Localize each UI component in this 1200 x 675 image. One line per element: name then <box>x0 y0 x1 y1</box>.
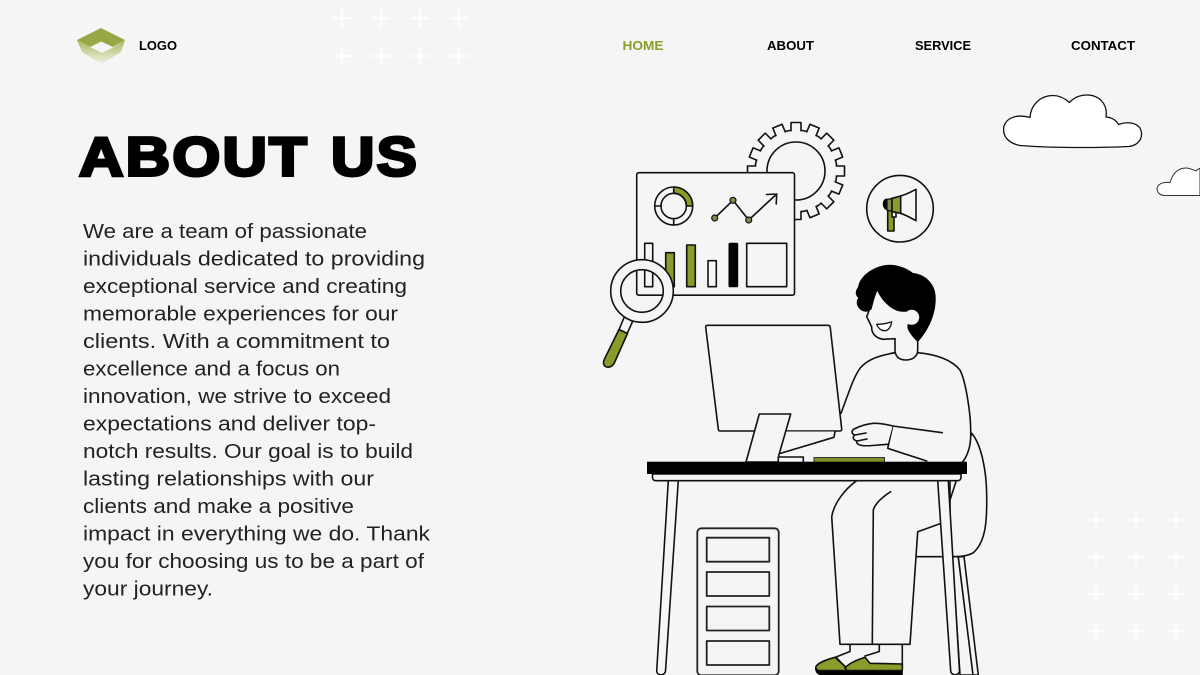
illustration: monitor <box>706 325 842 462</box>
body text block: notch results. Our goal is to build <box>83 440 413 463</box>
body text block: We are a team of passionate <box>83 220 367 243</box>
icon: magnifying glass <box>603 260 673 367</box>
drawer cabinet <box>697 528 779 675</box>
shoes <box>816 657 902 674</box>
monitor screen <box>706 325 842 431</box>
body text block: innovation, we strive to exceed <box>83 385 391 408</box>
illustration: dashboard panel <box>637 173 794 295</box>
monitor stand <box>746 414 791 462</box>
title: ABOUT <box>79 126 309 188</box>
line chart with arrow <box>712 194 777 223</box>
monitor base <box>778 432 835 454</box>
nav item: service: SERVICE <box>915 38 971 53</box>
illustration: gear <box>748 122 844 220</box>
ear <box>904 310 919 325</box>
icon: megaphone <box>867 175 933 242</box>
cloud: small <box>1157 168 1200 196</box>
title <box>79 126 419 188</box>
title: US <box>331 126 419 188</box>
nav item: home: HOME <box>622 38 664 53</box>
sleeve <box>888 426 942 461</box>
body text block: clients. With a commitment to <box>83 330 390 353</box>
keyboard <box>814 458 884 462</box>
neck <box>895 322 918 360</box>
donut chart <box>655 187 693 225</box>
body text block: impact in everything we do. Thank <box>83 522 431 546</box>
body text block: lasting relationships with our <box>83 468 374 490</box>
hand <box>852 423 893 446</box>
illustration: chair <box>916 433 987 675</box>
body text block: clients and make a positive <box>83 495 354 518</box>
face <box>867 285 925 342</box>
desk apron <box>652 474 961 481</box>
hair <box>856 265 936 342</box>
decorative plus pattern: top <box>333 9 468 64</box>
mouth <box>877 322 892 331</box>
bar chart <box>645 243 787 287</box>
body text block: expectations and deliver top- <box>83 412 376 436</box>
desk top <box>647 462 967 474</box>
body text block: memorable experiences for our <box>83 302 398 326</box>
decorative plus pattern: bottom right <box>1088 512 1185 639</box>
logo mark <box>77 28 125 64</box>
nav item: contact: CONTACT <box>1071 38 1135 53</box>
illustration: person <box>816 265 971 674</box>
body text block: individuals dedicated to providing <box>83 248 425 270</box>
torso <box>840 353 971 463</box>
body text block: excellence and a focus on <box>83 358 340 380</box>
nav item: about: ABOUT <box>767 38 814 53</box>
body text block: you for choosing us to be a part of <box>83 550 424 573</box>
cloud: large <box>1004 95 1142 148</box>
body text block: your journey. <box>83 578 213 600</box>
body text block <box>83 220 431 600</box>
navigation menu <box>622 38 1135 53</box>
logo text: LOGO <box>139 38 177 53</box>
illustration: desk <box>647 462 967 675</box>
body text block: exceptional service and creating <box>83 275 407 298</box>
monitor base outline <box>778 432 835 462</box>
legs <box>832 481 945 668</box>
